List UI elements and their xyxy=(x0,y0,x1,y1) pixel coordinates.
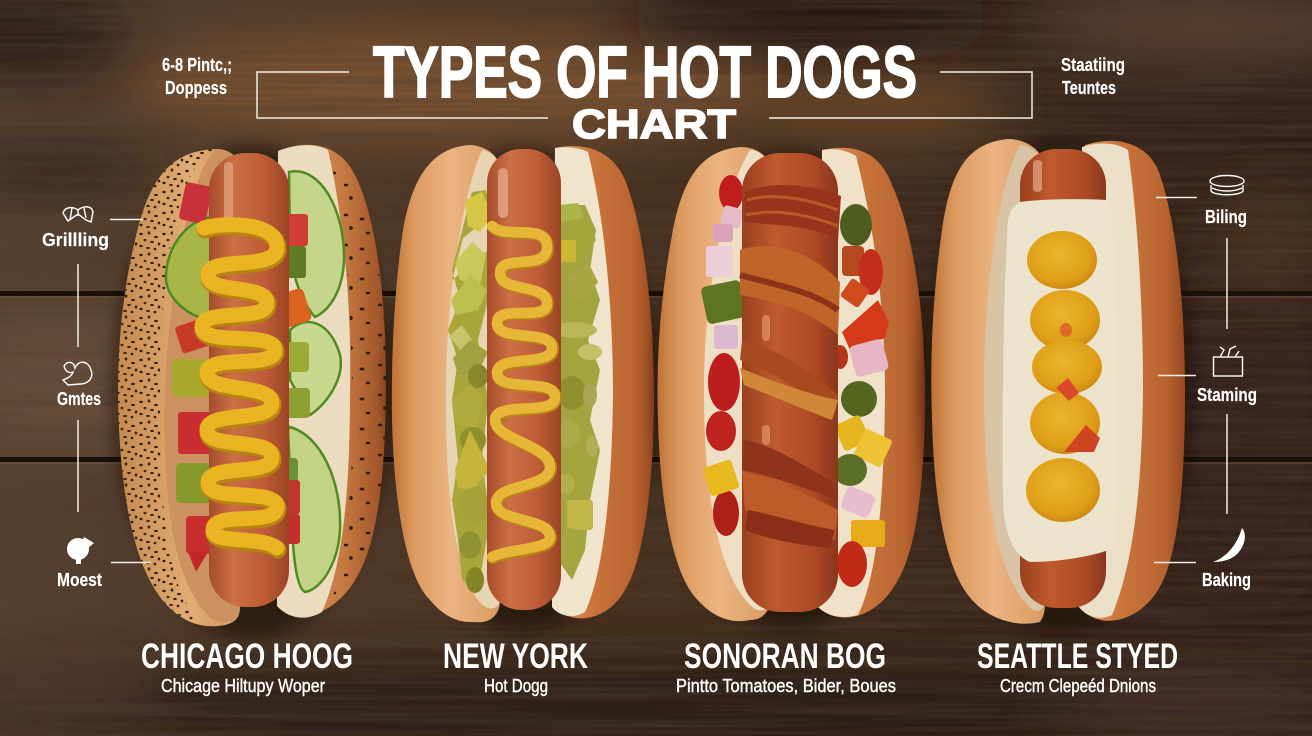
Moest label: Moest xyxy=(57,570,102,590)
left bun xyxy=(658,147,770,621)
Gmtes label: Gmtes xyxy=(57,389,101,409)
caption: New York: NEW YORK xyxy=(443,637,588,676)
right connector lines xyxy=(1154,198,1227,562)
hot dog: Chicago xyxy=(114,145,390,638)
top-left note: Doppess xyxy=(165,78,227,98)
sausage xyxy=(1020,149,1106,608)
left cooking methods xyxy=(42,207,151,590)
subtitle: CHART xyxy=(572,101,736,147)
left seeded bun xyxy=(118,149,240,626)
top-left note: 6-8 Pintc,; xyxy=(162,55,232,75)
cream cheese strip xyxy=(1003,199,1117,562)
icon: steamer xyxy=(1214,346,1242,376)
bacon-wrapped sausage xyxy=(740,153,841,612)
icon: grill xyxy=(63,207,93,222)
sausage xyxy=(487,149,561,610)
caption: Sonoran: Pintto Tomatoes, Bider, Boues xyxy=(676,676,896,696)
caption: Seattle xyxy=(977,637,1178,696)
caption: Sonoran: SONORAN BOG xyxy=(684,637,886,676)
main title: TYPES OF HOT DOGS xyxy=(373,33,917,113)
title block xyxy=(162,33,1125,147)
icon: pot xyxy=(1210,176,1244,195)
top-left note xyxy=(162,55,232,98)
Moest label xyxy=(57,537,102,590)
right seeded bun xyxy=(277,145,386,618)
caption: New York: Hot Dogg xyxy=(484,676,548,696)
toppings right xyxy=(832,204,893,587)
left bun xyxy=(392,145,500,622)
Grilling label: Grillling xyxy=(42,230,109,250)
mustard zigzag xyxy=(202,225,278,550)
caption: Seattle: SEATTLE STYED xyxy=(977,637,1178,676)
Baking label: Baking xyxy=(1202,570,1251,590)
Grilling label xyxy=(42,207,109,250)
right bun xyxy=(552,146,654,618)
Gmtes label xyxy=(57,362,101,409)
sausage xyxy=(209,153,289,607)
left bun xyxy=(931,139,1045,624)
left connector lines xyxy=(78,220,151,562)
right bun xyxy=(818,148,925,618)
mustard zigzag xyxy=(492,226,556,558)
caption: New York xyxy=(443,637,588,696)
Boiling label: Biling xyxy=(1205,207,1247,227)
caption: Chicago xyxy=(141,637,353,696)
peppers and pickles xyxy=(172,182,313,572)
caption: Seattle: Crecm Clepeéd Dnions xyxy=(1000,676,1156,696)
toppings left xyxy=(700,175,747,536)
right bun xyxy=(1078,141,1185,621)
icon: leaf bundle xyxy=(63,362,92,385)
relish right xyxy=(553,203,602,580)
hot dog: Seattle xyxy=(924,139,1192,630)
top-right note xyxy=(1061,55,1125,98)
Steaming label xyxy=(1197,346,1257,405)
hot dog: New York xyxy=(391,145,655,630)
Baking label xyxy=(1202,528,1251,590)
icon: drumstick xyxy=(67,537,94,564)
right cooking methods xyxy=(1154,176,1257,590)
caramelised onion blobs xyxy=(1026,231,1102,522)
caption: Sonoran xyxy=(676,637,896,696)
Steaming label: Staming xyxy=(1197,385,1257,405)
title frame xyxy=(257,72,1032,118)
top-right note: Staatiing xyxy=(1061,55,1125,75)
icon: crescent xyxy=(1213,528,1245,562)
hot dog: Sonoran xyxy=(658,147,926,628)
caption: Chicago: CHICAGO HOOG xyxy=(141,637,353,676)
relish left xyxy=(448,190,492,593)
Boiling label xyxy=(1205,176,1247,227)
caption: Chicago: Chicage Hiltupy Woper xyxy=(161,676,325,696)
cucumbers xyxy=(166,171,344,592)
top-right note: Teuntes xyxy=(1062,78,1116,98)
